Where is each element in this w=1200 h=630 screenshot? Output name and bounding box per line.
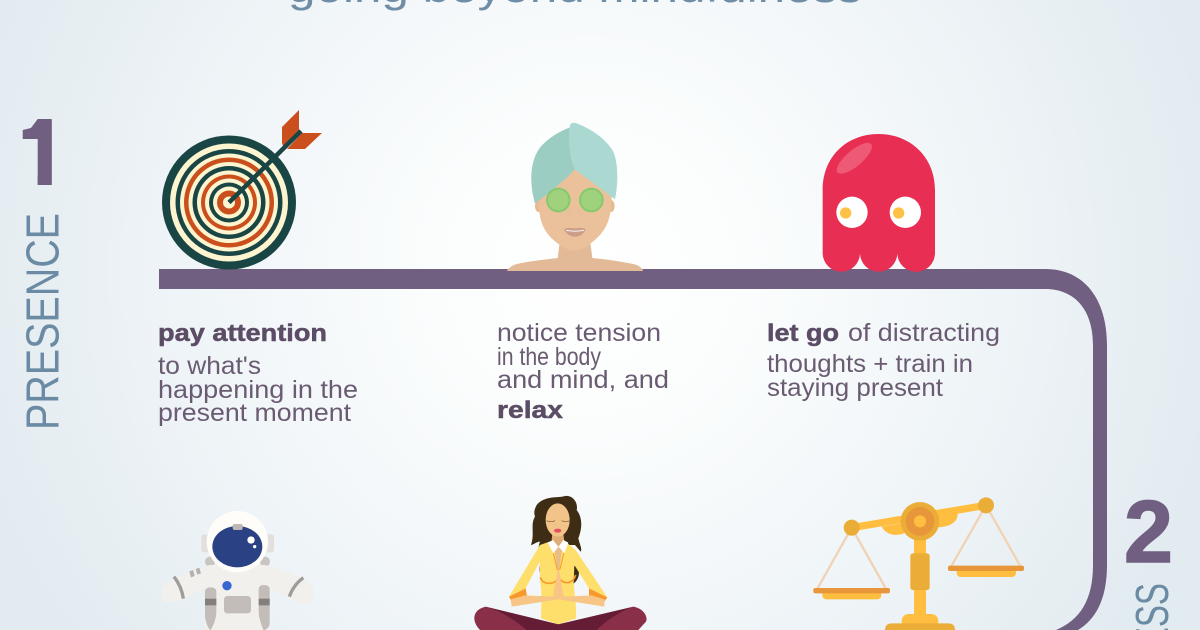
icon: meditating woman	[474, 496, 647, 630]
text: pay attention: to what's	[158, 352, 261, 380]
section number 2: 2	[1124, 482, 1173, 581]
text: let go of distracting thoughts: of distracting	[848, 319, 1000, 347]
section label: presence: PRESENCE	[16, 213, 68, 430]
text: notice tension and relax: in the body	[497, 343, 601, 371]
text: notice tension and relax	[497, 319, 669, 424]
text: notice tension and relax: and mind, and	[497, 366, 669, 394]
text: let go of distracting thoughts: thoughts + train in	[767, 350, 973, 378]
icon: red ghost	[823, 134, 935, 272]
text: let go of distracting thoughts	[767, 319, 1000, 402]
icon: target with arrow	[162, 110, 322, 270]
text: pay attention: happening in the	[158, 376, 358, 404]
text: let go of distracting thoughts: staying present	[767, 374, 943, 402]
section number 1: 1	[19, 100, 71, 205]
text: let go of distracting thoughts: let go	[767, 320, 839, 347]
icon: astronaut	[161, 511, 314, 630]
text: pay attention	[158, 320, 358, 427]
icon: balance scale	[813, 497, 1024, 630]
connecting path line	[159, 269, 1107, 630]
section number 1	[22, 119, 52, 185]
icon: woman with towel and cucumber slices	[507, 123, 643, 271]
text: notice tension and relax: relax	[497, 397, 564, 424]
text: notice tension and relax: notice tension	[497, 319, 661, 347]
text: pay attention: pay attention	[158, 320, 327, 347]
text: pay attention: present moment	[158, 399, 351, 427]
